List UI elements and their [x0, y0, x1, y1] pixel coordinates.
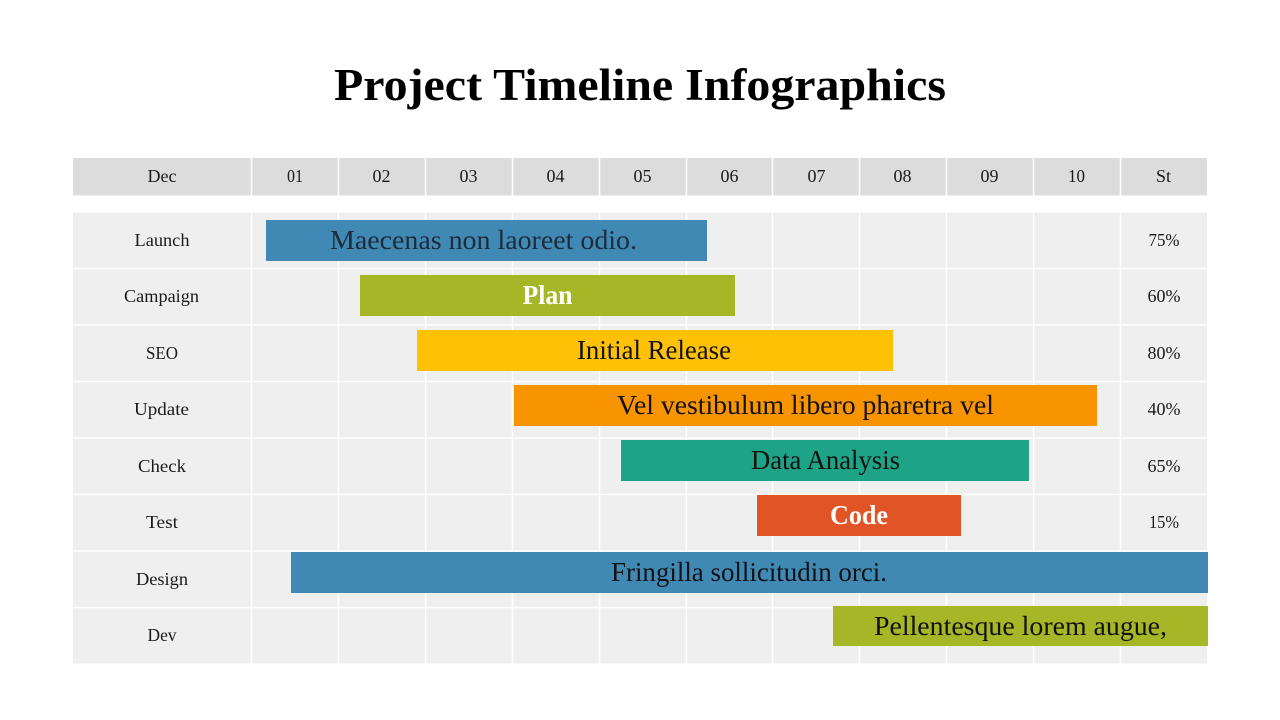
bar: Plan	[360, 275, 735, 316]
row labels: Test	[146, 512, 178, 532]
status percentages	[1148, 230, 1180, 532]
table header: 07	[808, 166, 826, 186]
row labels: SEO	[146, 343, 178, 363]
table header: 08	[894, 166, 912, 186]
bar: Pellentesque	[833, 606, 1208, 646]
table header: Dec	[148, 166, 177, 186]
status percentages: 40%	[1148, 399, 1180, 419]
table header	[73, 158, 1207, 196]
table header: 04	[546, 166, 565, 186]
row labels: Design	[136, 569, 188, 589]
bar: Pellentesque: Pellentesque lorem augue,	[874, 611, 1167, 641]
row labels: Campaign	[124, 286, 199, 306]
bar: Vel vestibulum: Vel vestibulum libero pharetra vel	[617, 390, 994, 420]
bar: Vel vestibulum	[514, 385, 1097, 426]
bar: Maecenas	[266, 220, 707, 261]
row labels	[124, 230, 199, 645]
table header: 01	[287, 166, 303, 186]
bar: Initial Release: Initial Release	[577, 335, 731, 365]
table header: St	[1156, 166, 1171, 186]
bar: Data Analysis	[621, 440, 1029, 481]
bar: Code: Code	[830, 500, 888, 530]
status percentages: 75%	[1148, 230, 1180, 250]
table body grid	[73, 212, 1207, 664]
table header: 10	[1068, 166, 1085, 186]
table header: 03	[460, 166, 478, 186]
bar: Fringilla	[291, 552, 1208, 593]
status percentages: 80%	[1148, 343, 1180, 363]
row labels: Check	[138, 456, 186, 476]
status percentages: 65%	[1148, 456, 1180, 476]
status percentages: 15%	[1149, 512, 1179, 532]
bar: Code	[757, 495, 961, 536]
bar: Data Analysis: Data Analysis	[751, 445, 900, 475]
table header: 09	[980, 166, 999, 186]
table header: 06	[720, 166, 739, 186]
row labels: Dev	[148, 625, 177, 645]
row labels: Update	[134, 399, 189, 419]
title: Project Timeline Infographics	[334, 60, 946, 110]
status percentages: 60%	[1148, 286, 1180, 306]
table header: 02	[372, 166, 390, 186]
table header: 05	[634, 166, 652, 186]
row labels: Launch	[134, 230, 190, 250]
bar: Plan: Plan	[522, 280, 572, 310]
bar: Initial Release	[417, 330, 893, 371]
bar: Maecenas: Maecenas non laoreet odio.	[330, 225, 637, 255]
bar: Fringilla: Fringilla sollicitudin orci.	[611, 557, 887, 587]
